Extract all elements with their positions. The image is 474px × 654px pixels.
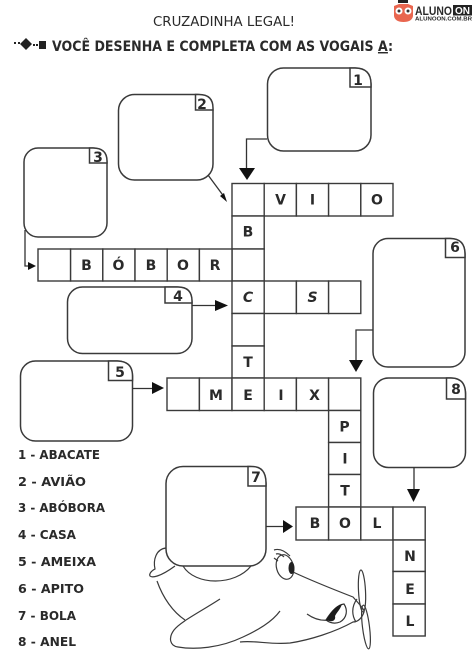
airplane illustration (150, 548, 372, 649)
crossword word 7: BOLA: B (310, 516, 320, 532)
icon: owl (394, 0, 413, 22)
plane eye (274, 549, 296, 581)
drawing box 1: 1 (353, 73, 363, 89)
plane wing (171, 599, 280, 648)
instruction heading (14, 38, 393, 55)
crossword word 7: BOLA: L (373, 516, 382, 532)
plane mouth (307, 604, 346, 623)
arrow: box 5 to crossword (132, 382, 164, 394)
crossword word: ABACATE column: B (243, 224, 253, 240)
crossword word: ABACATE column (232, 216, 264, 378)
plane belly under box (183, 566, 251, 581)
crossword word 5: AMEIXA: X (309, 388, 320, 404)
drawing box 6: 6 (450, 240, 460, 256)
crossword word 5: AMEIXA: E (243, 388, 253, 404)
crossword word 5: AMEIXA: I (278, 388, 284, 404)
crossword word 7: BOLA: O (339, 516, 351, 532)
crossword word 8: ANEL column: L (406, 614, 415, 630)
drawing box 1 (268, 68, 371, 151)
drawing box 5 (20, 361, 132, 441)
crossword word 8: ANEL column (393, 540, 425, 636)
crossword word 3: ABÓBORA: Ó (113, 256, 125, 274)
instruction text: VOCÊ DESENHA E COMPLETA COM AS VOGAIS A: (52, 38, 393, 55)
crossword word 4: CASA: S (307, 290, 318, 306)
arrow: box 3 to crossword (25, 230, 36, 270)
arrow: box 2 to crossword (208, 175, 227, 202)
crossword word: ABACATE column: T (243, 355, 253, 371)
crossword word 3: ABÓBORA: B (81, 258, 92, 274)
drawing box 3: 3 (93, 150, 103, 166)
arrow: box 6 to crossword (349, 330, 373, 372)
crossword word 6: APITO column: I (342, 452, 348, 468)
crossword word 6: APITO column (329, 410, 361, 507)
list item 8: 8 - ANEL (18, 634, 76, 649)
crossword word 3: ABÓBORA: O (177, 258, 189, 274)
crossword word 8: ANEL column: E (405, 582, 415, 598)
drawing box 7 (166, 466, 266, 566)
drawing box 7: 7 (251, 470, 261, 486)
crossword word 1: AVIÃO: V (275, 192, 286, 208)
drawing box 2: 2 (197, 97, 207, 113)
drawing box 5: 5 (115, 365, 125, 381)
title: CRUZADINHA LEGAL! (153, 15, 295, 30)
list item 5: 5 - AMEIXA (18, 554, 96, 569)
crossword word: ABACATE column: C (243, 290, 254, 306)
plane propeller (357, 570, 372, 649)
drawing box 8 (374, 378, 466, 468)
answer key list (18, 447, 105, 649)
arrow: box 1 to crossword (239, 139, 267, 180)
logo: Aluno On (394, 0, 472, 22)
logo wordmark: ALUNO (415, 4, 452, 18)
drawing box 4 (68, 287, 192, 354)
list item 4: 4 - CASA (18, 527, 76, 542)
list item 6: 6 - APITO (18, 581, 84, 596)
crossword word 5: AMEIXA (167, 378, 361, 410)
crossword word 8: ANEL column: N (404, 549, 416, 565)
list item 3: 3 - ABÓBORA (18, 500, 105, 515)
logo url: ALUNOON.COM.BR (415, 16, 472, 22)
icon: decorative bullets (14, 38, 46, 50)
drawing box 4: 4 (173, 289, 183, 305)
crossword word 3: ABÓBORA: B (146, 258, 156, 274)
arrow: box 8 to crossword (407, 467, 420, 502)
logo badge: ON: ON (455, 6, 470, 17)
plane tail (150, 548, 175, 577)
list item 1: 1 - ABACATE (18, 447, 100, 462)
arrow: box 4 to crossword (192, 300, 228, 311)
crossword word 4: CASA (264, 281, 361, 314)
list item 2: 2 - AVIÃO (18, 474, 86, 489)
crossword word 1: AVIÃO: O (371, 192, 383, 208)
plane head (240, 572, 364, 643)
drawing box 8: 8 (451, 382, 461, 398)
plane back (157, 581, 185, 620)
drawing box 6 (373, 238, 465, 367)
crossword word 6: APITO column: P (339, 420, 350, 436)
drawing box 3 (24, 148, 107, 237)
crossword word 1: AVIÃO (232, 184, 393, 216)
crossword word 3: ABÓBORA (38, 249, 232, 281)
plane nose (353, 599, 357, 622)
crossword word 1: AVIÃO: I (310, 192, 315, 208)
crossword word 6: APITO column: T (340, 484, 350, 500)
crossword word 5: AMEIXA: M (209, 388, 223, 404)
crossword word 7: BOLA (296, 507, 425, 540)
list item 7: 7 - BOLA (18, 608, 76, 623)
drawing box 2 (118, 94, 213, 180)
crossword word 3: ABÓBORA: R (210, 258, 221, 274)
arrow: box 7 to crossword (266, 520, 293, 533)
